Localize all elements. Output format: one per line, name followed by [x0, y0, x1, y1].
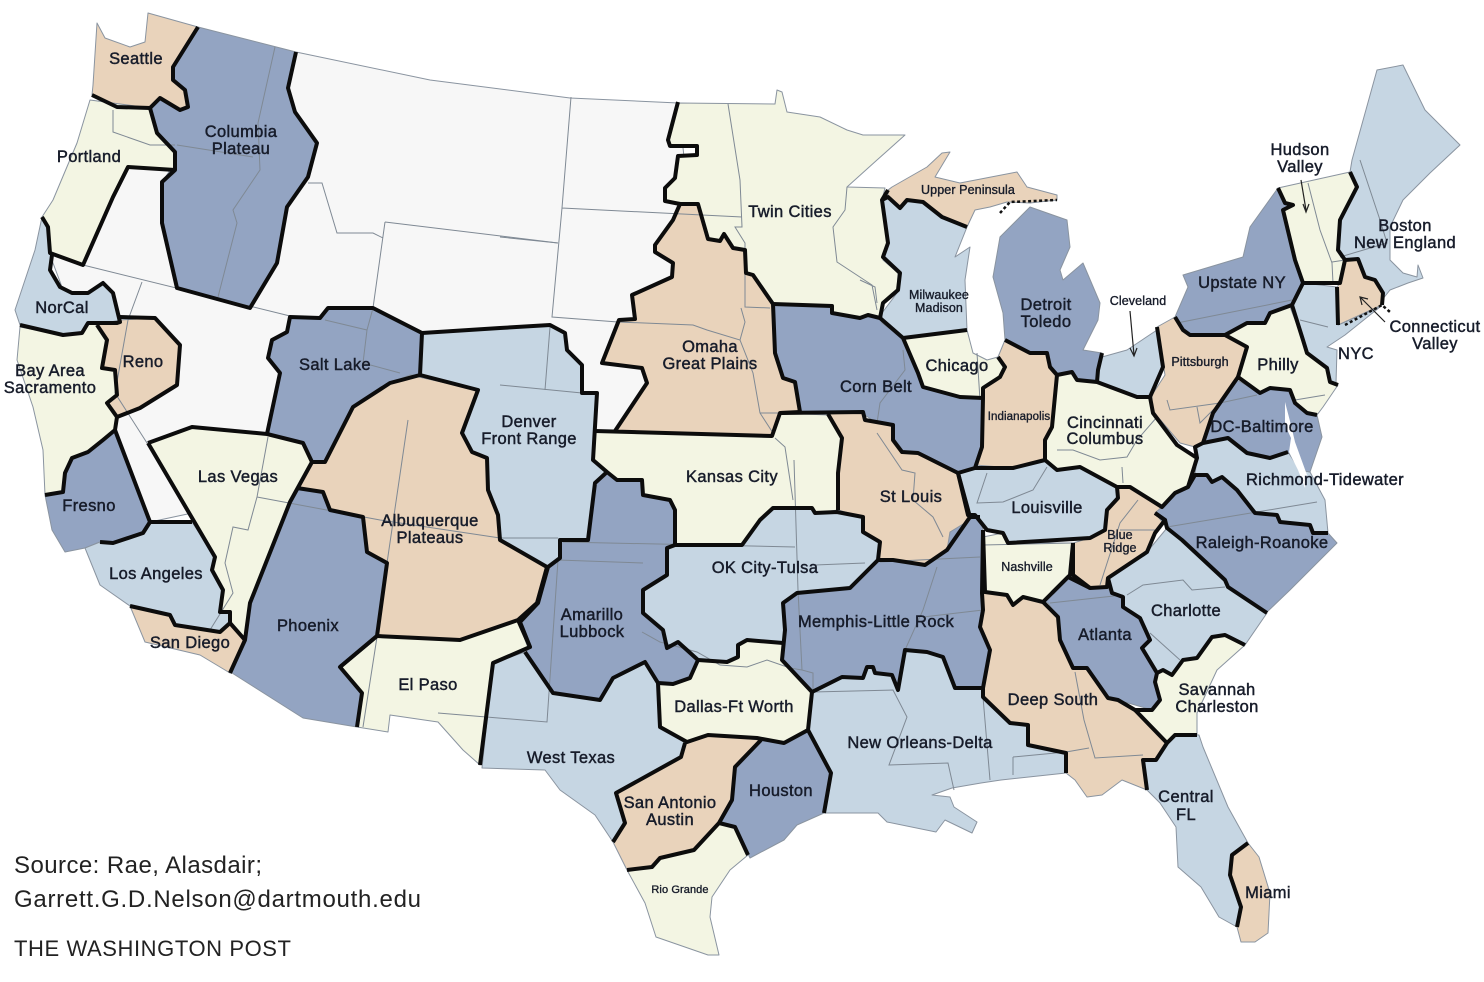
- label: OK City-Tulsa: OK City-Tulsa: [712, 559, 819, 577]
- region: NorCal: [15, 217, 120, 335]
- label: Blue Ridge: Blue: [1107, 528, 1133, 542]
- region: Albuquerque Plateaus: [297, 375, 547, 640]
- region: San Diego: [130, 606, 245, 673]
- label: Pittsburgh: Pittsburgh: [1171, 355, 1229, 369]
- region: Houston: [719, 730, 831, 858]
- label: Las Vegas: Las Vegas: [198, 468, 278, 486]
- region: Cleveland: [1097, 330, 1163, 397]
- region: Fresno: [45, 430, 150, 552]
- label: Deep South: Deep South: [1008, 691, 1098, 709]
- source credit: [14, 852, 421, 913]
- region: Portland: [42, 100, 175, 265]
- label: Denver Front Range: Denver: [501, 413, 557, 431]
- label: Upper Peninsula: Upper Peninsula: [921, 183, 1015, 197]
- region: Louisville: [958, 460, 1118, 543]
- label: Detroit Toledo: Toledo: [1021, 313, 1071, 331]
- label: Miami: Miami: [1245, 884, 1291, 902]
- label: Dallas-Ft Worth: Dallas-Ft Worth: [674, 698, 794, 716]
- label: Memphis-Little Rock: Memphis-Little Rock: [798, 613, 954, 631]
- label: Columbia Plateau: Columbia: [205, 123, 277, 141]
- region: Charlotte: [1108, 528, 1267, 675]
- region: Amarillo Lubbock: [520, 472, 698, 700]
- label: Amarillo Lubbock: Lubbock: [560, 623, 625, 641]
- region: Upstate NY: [1175, 188, 1303, 335]
- region: Denver Front Range: [410, 325, 607, 567]
- region: Kansas City: [593, 413, 842, 545]
- label: Charlotte: Charlotte: [1151, 602, 1221, 620]
- label: Atlanta: Atlanta: [1078, 626, 1132, 644]
- label: New Orleans-Delta: New Orleans-Delta: [847, 734, 993, 752]
- region: Boston New England: [1338, 65, 1460, 300]
- label: Los Angeles: Los Angeles: [109, 565, 203, 583]
- label: San Diego: San Diego: [150, 634, 230, 652]
- label: Houston: Houston: [749, 782, 813, 800]
- label: Philly: Philly: [1257, 356, 1299, 374]
- state boundary lines: [83, 47, 1387, 790]
- label: Boston New England: New England: [1354, 234, 1456, 252]
- label: Omaha Great Plains: Great Plains: [662, 355, 758, 373]
- region: Philly: [1225, 307, 1338, 415]
- region: Deep South: [980, 592, 1167, 797]
- water: Chesapeake Bay: [1285, 402, 1307, 488]
- label: NYC: NYC: [1338, 345, 1374, 363]
- region: Cincinnati Columbus: [1045, 372, 1197, 507]
- region: Upper Peninsula: [888, 152, 1057, 227]
- region: San Antonio Austin: [613, 735, 761, 870]
- region: Las Vegas: [148, 427, 312, 640]
- label: Amarillo Lubbock: Amarillo: [561, 606, 623, 624]
- label: Milwaukee Madison: Madison: [915, 301, 963, 315]
- label: St Louis: St Louis: [880, 488, 942, 506]
- region: Atlanta: [1043, 577, 1160, 710]
- label: Reno: Reno: [123, 353, 163, 371]
- region: Bay Area Sacramento: [17, 323, 117, 495]
- label: Raleigh-Roanoke: Raleigh-Roanoke: [1196, 534, 1328, 552]
- region: Salt Lake: [267, 308, 422, 462]
- label: Seattle: Seattle: [109, 50, 163, 68]
- label: Hudson Valley: Valley: [1277, 158, 1323, 176]
- region: OK City-Tulsa: [643, 508, 880, 662]
- region: Omaha Great Plains: [602, 204, 800, 436]
- label: Boston New England: Boston: [1378, 217, 1432, 235]
- region: Columbia Plateau: [150, 27, 317, 308]
- region: Savannah Charleston: [1135, 635, 1245, 743]
- label: Cincinnati Columbus: Columbus: [1066, 430, 1144, 448]
- label: Phoenix: Phoenix: [277, 617, 339, 635]
- label: Salt Lake: Salt Lake: [299, 356, 371, 374]
- arrow: Cleveland: [1130, 311, 1137, 356]
- region: Nashville: [983, 533, 1073, 605]
- region: Memphis-Little Rock: [782, 517, 990, 692]
- label: Twin Cities: Twin Cities: [748, 203, 832, 221]
- source credit: Source: Rae, Alasdair;: [14, 852, 262, 879]
- publisher credit: THE WASHINGTON POST: [14, 936, 291, 961]
- region: Richmond-Tidewater: [1195, 438, 1328, 533]
- region: Hudson Valley: [1278, 172, 1357, 283]
- label: Hudson Valley: Hudson: [1271, 141, 1329, 159]
- region: St Louis: [828, 412, 970, 565]
- region: NYC: [1292, 283, 1380, 383]
- region: Connecticut Valley: [1337, 259, 1383, 325]
- arrow: Connecticut Valley: [1360, 297, 1385, 322]
- label: Fresno: Fresno: [62, 497, 116, 515]
- label: NorCal: NorCal: [35, 299, 89, 317]
- label: Central FL: FL: [1176, 806, 1196, 824]
- label: Savannah Charleston: Charleston: [1175, 698, 1259, 716]
- label: San Antonio Austin: San Antonio: [624, 794, 716, 812]
- label: Bay Area Sacramento: Sacramento: [4, 379, 96, 397]
- region: Corn Belt: [773, 304, 983, 473]
- label: Milwaukee Madison: Milwaukee: [909, 288, 969, 302]
- map background: unassigned white land: [50, 52, 700, 522]
- label: Upstate NY: Upstate NY: [1198, 274, 1286, 292]
- label: Blue Ridge: Ridge: [1103, 541, 1137, 555]
- region: Rio Grande: [627, 823, 748, 955]
- region: Blue Ridge: [1073, 487, 1165, 588]
- region: Raleigh-Roanoke: [1155, 475, 1337, 612]
- label: Central FL: Central: [1158, 788, 1214, 806]
- region: Dallas-Ft Worth: [658, 640, 812, 743]
- label: Bay Area Sacramento: Bay Area: [15, 362, 85, 380]
- arrow: Hudson Valley: [1301, 180, 1309, 212]
- region: West Texas: [482, 652, 687, 842]
- region: Twin Cities: [665, 90, 905, 318]
- dotted boundary: Upper Peninsula: [1000, 200, 1057, 213]
- region: Indianapolis: [975, 340, 1057, 468]
- label: Connecticut Valley: Connecticut: [1390, 318, 1480, 336]
- region: Miami: [1230, 843, 1270, 942]
- dotted boundary: Long Island: [1345, 305, 1390, 325]
- label: Cleveland: Cleveland: [1110, 294, 1166, 308]
- region: Pittsburgh: [1152, 317, 1247, 447]
- label: Albuquerque Plateaus: Albuquerque: [381, 512, 479, 530]
- region: El Paso: [340, 620, 528, 765]
- label: West Texas: West Texas: [527, 749, 615, 767]
- region: Milwaukee Madison: [882, 197, 970, 338]
- label: Corn Belt: Corn Belt: [840, 378, 912, 396]
- region: Seattle: [92, 13, 198, 110]
- label: Denver Front Range: Front Range: [481, 430, 577, 448]
- region: Phoenix: [232, 488, 387, 727]
- region: Los Angeles: [85, 522, 230, 632]
- label: San Antonio Austin: Austin: [646, 811, 694, 829]
- source credit: Garrett.G.D.Nelson@dartmouth.edu: [14, 886, 421, 913]
- label: Columbia Plateau: Plateau: [212, 140, 270, 158]
- region: Central FL: [1143, 735, 1248, 927]
- region: Chicago: [903, 330, 1005, 398]
- region: New Orleans-Delta: [808, 650, 1066, 833]
- label: Rio Grande: Rio Grande: [651, 884, 709, 896]
- label: DC-Baltimore: DC-Baltimore: [1210, 418, 1314, 436]
- label: Kansas City: Kansas City: [686, 468, 778, 486]
- label: Indianapolis: Indianapolis: [988, 411, 1050, 423]
- label: Portland: Portland: [57, 148, 121, 166]
- label: Albuquerque Plateaus: Plateaus: [396, 529, 464, 547]
- region: Reno: [97, 318, 180, 417]
- label: Savannah Charleston: Savannah: [1178, 681, 1256, 699]
- label: Louisville: Louisville: [1011, 499, 1083, 517]
- label: Chicago: Chicago: [926, 357, 988, 375]
- label: Richmond-Tidewater: Richmond-Tidewater: [1246, 471, 1404, 489]
- region: DC-Baltimore: [1203, 380, 1322, 472]
- label: Nashville: Nashville: [1001, 560, 1053, 574]
- region: Detroit Toledo: [993, 207, 1102, 382]
- label: Detroit Toledo: Detroit: [1020, 296, 1072, 314]
- label: Cincinnati Columbus: Cincinnati: [1067, 414, 1143, 432]
- label: El Paso: El Paso: [398, 676, 458, 694]
- label: Connecticut Valley: Valley: [1412, 335, 1458, 353]
- label: Omaha Great Plains: Omaha: [682, 338, 738, 356]
